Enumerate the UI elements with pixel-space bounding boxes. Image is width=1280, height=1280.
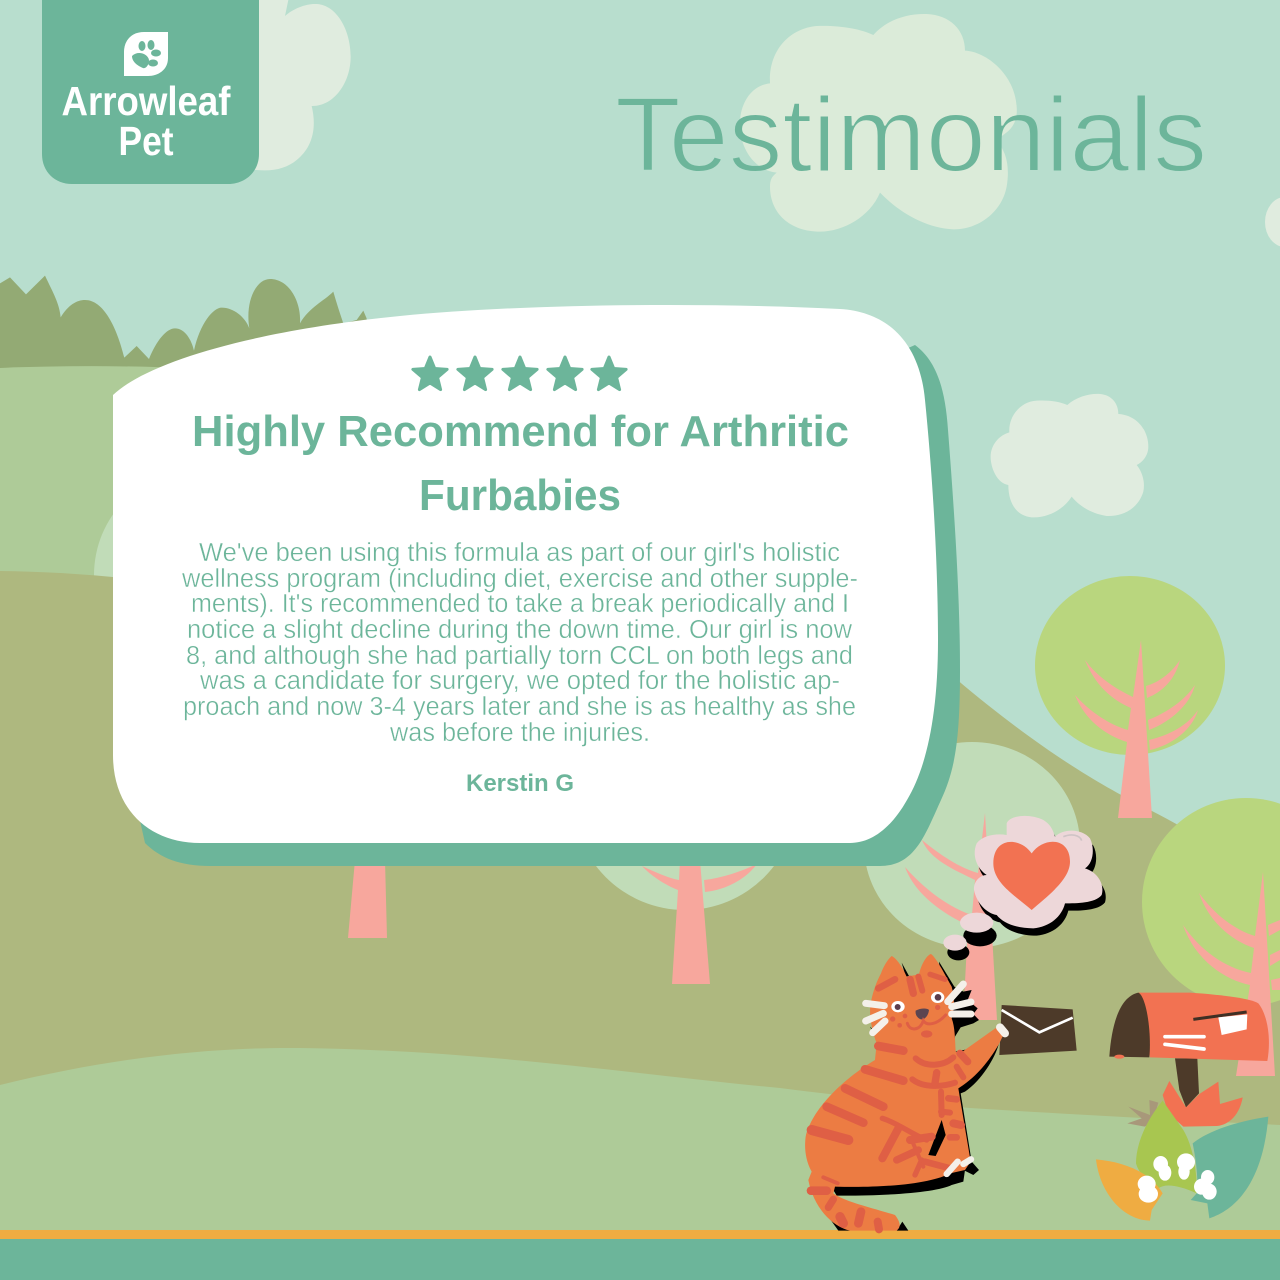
testimonial body text: notice a slight decline during the down time. Our girl is now: [187, 616, 853, 644]
mailbox and leaf logo group: [1096, 993, 1269, 1221]
testimonial body text: [181, 539, 858, 747]
thought bubble with heart: [943, 816, 1106, 960]
card heading: Highly Recommend for Arthritic: [192, 407, 849, 456]
cat stripes: [811, 974, 968, 1229]
logo leaves with paw prints: [1096, 1101, 1268, 1221]
card shadow: [113, 345, 960, 866]
logo badge: [42, 0, 259, 184]
bushes on horizon: [0, 276, 367, 368]
tree: under card left trunk: [348, 860, 387, 938]
logo wordmark: Arrowleaf: [62, 78, 231, 124]
cat leg gap: [928, 1120, 946, 1156]
cloud: right edge: [1265, 197, 1280, 247]
tree: behind thought bubble: [864, 742, 1080, 1020]
tree: under card centre: [573, 686, 797, 984]
testimonial body text: was before the injuries.: [389, 719, 650, 747]
middle hill: olive: [0, 571, 1280, 1240]
cat body: [805, 954, 1003, 1231]
cat face: [890, 992, 946, 1038]
testimonial body text: wellness program (including diet, exercise and other supple-: [181, 565, 858, 593]
icon: leaf with paw: [124, 32, 168, 76]
tree: far right: [1142, 798, 1280, 1076]
logo wordmark: [62, 78, 231, 164]
testimonial body text: We've been using this formula as part of our girl's holistic: [199, 539, 840, 567]
back hill: light green: [0, 366, 940, 900]
envelope: [999, 1005, 1077, 1055]
mailbox: [1109, 993, 1269, 1107]
footer orange stripe: [0, 1230, 1280, 1239]
card heading: Furbabies: [419, 471, 621, 520]
logo wordmark: Pet: [118, 118, 174, 164]
cat black shadow: [828, 962, 999, 1231]
testimonial body text: ments). It's recommended to take a break periodically and I: [191, 590, 849, 618]
card body: [113, 305, 938, 843]
cloud: behind logo: [233, 0, 351, 170]
panel: testimonial card: [113, 305, 960, 866]
tree: left canopy behind card: [94, 469, 306, 681]
testimonial author: Kerstin G: [466, 770, 574, 797]
testimonial body text: proach and now 3-4 years later and she is as healthy as she: [183, 693, 856, 721]
foreground hill: [0, 1048, 1280, 1240]
flower at mailbox base: [1127, 1081, 1243, 1127]
cat: [805, 954, 1005, 1231]
cloud: behind title: [740, 14, 1017, 232]
tree: top right: [1035, 576, 1225, 818]
title: Testimonials: [615, 76, 1207, 194]
star rating: [413, 357, 626, 390]
cat whiskers and paws: [866, 984, 1005, 1174]
cloud: right middle: [991, 394, 1148, 517]
footer teal band: [0, 1239, 1280, 1280]
testimonial body text: was a candidate for surgery, we opted for the holistic ap-: [199, 667, 840, 695]
testimonial body text: 8, and although she had partially torn CCL on both legs and: [186, 642, 853, 670]
card heading: [192, 407, 849, 520]
